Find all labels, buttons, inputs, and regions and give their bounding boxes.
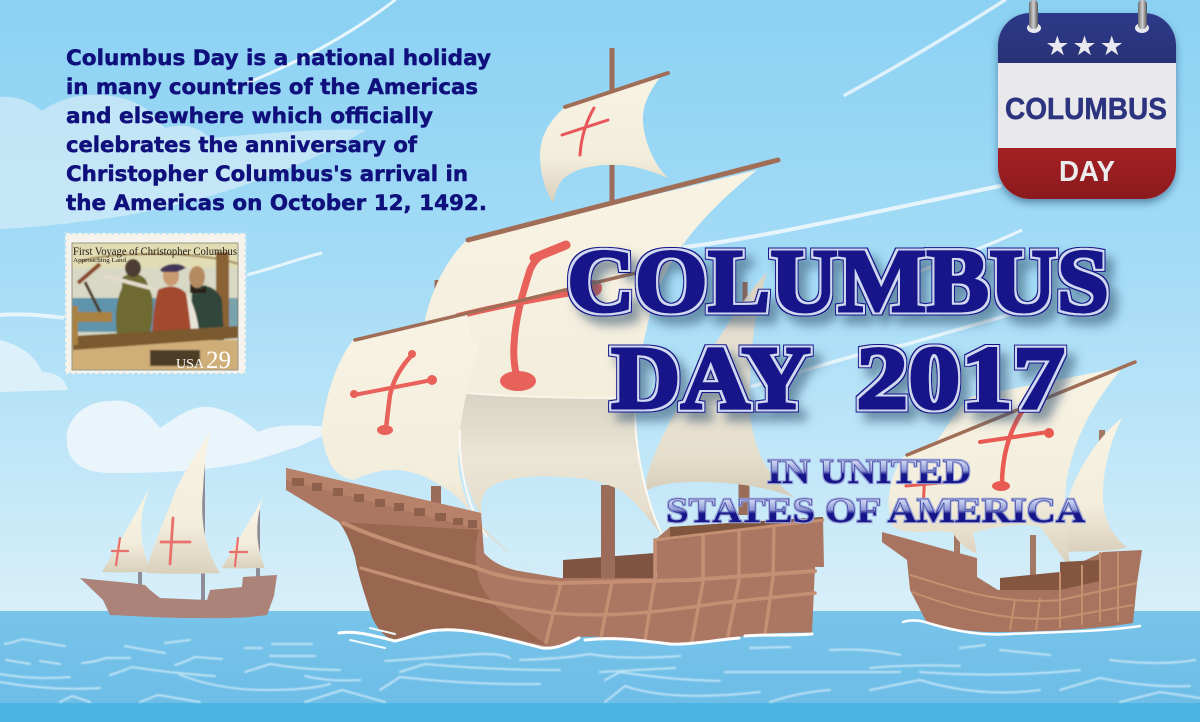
masts [140,450,258,600]
postage stamp: First Voyage of Christopher Columbus [73,246,237,258]
intro text block [66,46,491,215]
figures [116,274,153,340]
big cross [458,245,602,391]
hull [80,575,277,618]
plank lines [343,520,823,642]
jib sail [646,272,795,498]
large yard [468,160,778,240]
masts [436,48,745,565]
sea bottom band [0,703,1200,722]
ship: right caravel [882,362,1142,635]
ship: small left caravel [80,433,277,618]
main title [567,232,1109,428]
red band [998,148,1176,200]
foam [339,630,812,648]
subtitle: IN UNITED [767,452,971,491]
stars: ★★★ [1045,31,1127,62]
dark stern panel [339,522,546,645]
large upper sail [425,170,757,537]
intro text block: in many countries of the Americas [66,75,478,99]
main sail [889,367,1123,567]
crosses [112,518,247,566]
white band [998,63,1176,148]
small left sail cross [350,350,437,435]
postage stamp: USA [176,357,205,372]
intro text block: the Americas on October 12, 1492. [66,191,487,215]
blue band [998,13,1176,63]
stern rail [286,468,481,530]
crosses [906,410,1054,510]
main title: COLUMBUS [567,232,1109,331]
intro text block: Christopher Columbus's arrival in [66,162,468,186]
subtitle: STATES OF AMERICA [666,491,1086,530]
hull [882,532,1142,632]
calendar badge [998,0,1176,200]
deck [1000,560,1100,590]
intro text block: and elsewhere which officially [66,104,433,128]
long yard [355,272,640,340]
planks [910,552,1137,630]
rail and deck [72,340,238,370]
main title: DAY [611,329,811,428]
sails [102,487,152,572]
lower section of upper sail [458,393,663,537]
main title: 2017 [856,329,1065,428]
postage stamp: 29 [206,347,231,374]
foam [903,620,1140,635]
left sail [322,312,537,568]
sea [0,611,1200,704]
lower deck [563,553,655,578]
masts [957,425,1102,592]
calendar word day: DAY [1059,156,1115,188]
postage stamp: Approaching Land [73,257,127,264]
postage stamp [65,233,246,374]
calendar word columbus: COLUMBUS [1005,91,1167,126]
intro text block: celebrates the anniversary of [66,133,418,157]
yard [907,362,1135,455]
right jib sail [1059,418,1127,552]
rings [1027,0,1149,33]
intro text block: Columbus Day is a national holiday [66,46,491,70]
top sail cross [562,108,608,155]
upper deck [670,517,823,540]
ship: main caravel [286,48,824,648]
clouds and wind streaks [0,0,1026,473]
hull [286,468,824,647]
top yard [565,73,668,107]
subtitle [666,452,1086,530]
sea waves [0,639,1200,702]
top sail [540,75,668,203]
